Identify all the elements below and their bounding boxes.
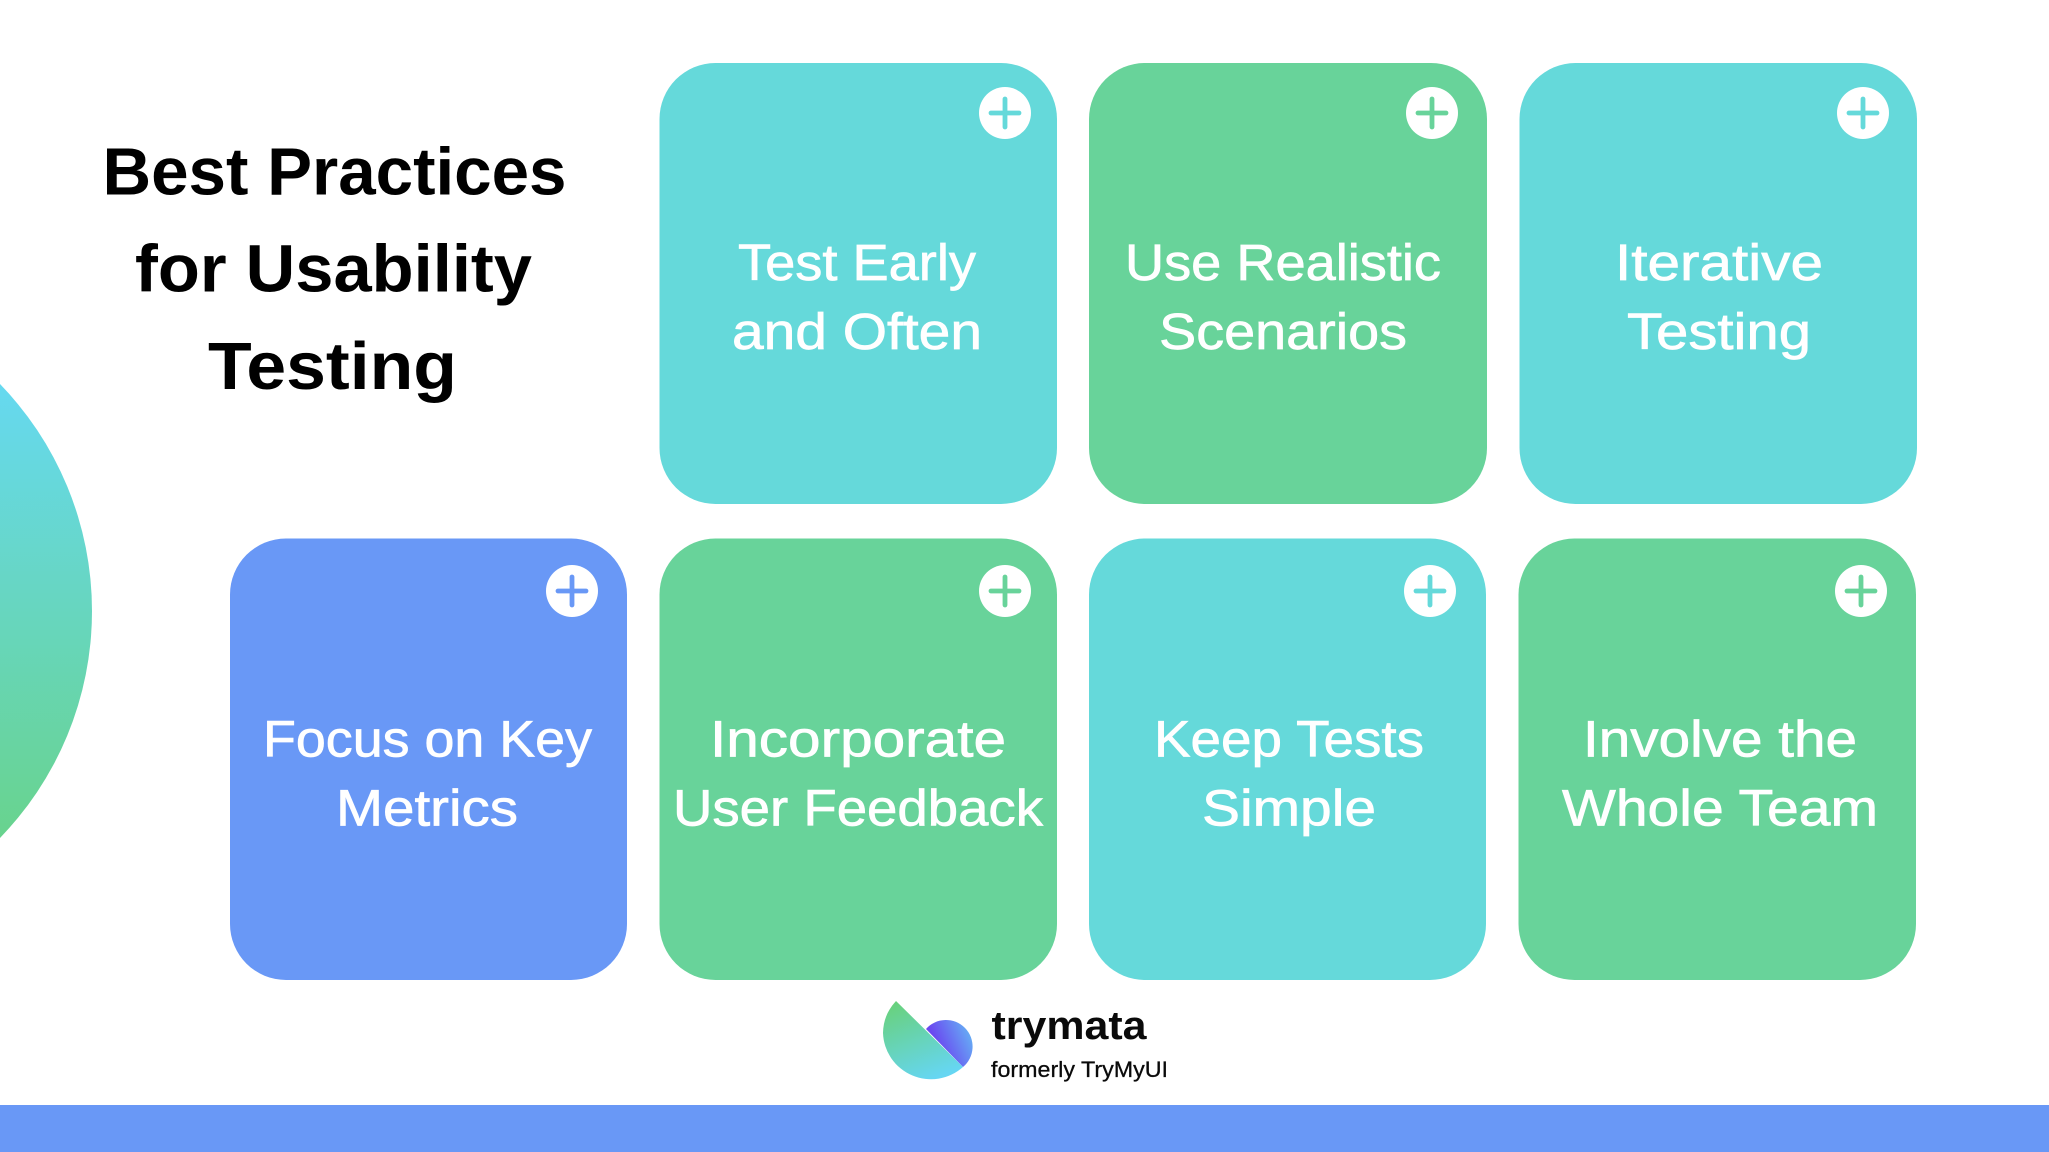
panel: Test Early and Often xyxy=(660,63,1057,504)
logo: trymata xyxy=(883,1001,1168,1082)
panel: Involve the Whole Team xyxy=(1518,538,1916,980)
panel: Use Realistic Scenarios: Use Realistic xyxy=(1125,234,1441,291)
logo: trymata: formerly TryMyUI xyxy=(991,1057,1168,1082)
panel: Incorporate User Feedback: Incorporate xyxy=(710,710,1006,768)
panel: Focus on Key Metrics xyxy=(230,538,627,980)
panel: Iterative Testing: Testing xyxy=(1627,303,1811,360)
panel: Iterative Testing xyxy=(1520,63,1917,504)
title: Testing xyxy=(208,329,457,404)
panel: Iterative Testing: Iterative xyxy=(1615,234,1823,291)
panel: Involve the Whole Team: Whole Team xyxy=(1562,780,1878,836)
panel: Incorporate User Feedback: User Feedback xyxy=(673,780,1044,836)
panel: Test Early and Often: Test Early xyxy=(738,234,977,291)
panel: Focus on Key Metrics: Metrics xyxy=(336,780,518,836)
title xyxy=(102,134,566,404)
title: Best Practices xyxy=(102,134,566,210)
background decorative gradient circle xyxy=(0,285,92,937)
panel: Involve the Whole Team: Involve the xyxy=(1583,710,1857,768)
title: for Usability xyxy=(135,232,532,306)
panel: Use Realistic Scenarios: Scenarios xyxy=(1159,303,1407,360)
panel: Use Realistic Scenarios xyxy=(1089,63,1487,504)
panel: Keep Tests Simple: Simple xyxy=(1202,780,1376,836)
panel: Keep Tests Simple: Keep Tests xyxy=(1154,710,1424,768)
footer bar xyxy=(0,1105,2049,1152)
logo: trymata: trymata xyxy=(992,1004,1147,1048)
panel: Focus on Key Metrics: Focus on Key xyxy=(263,710,593,768)
panel: Incorporate User Feedback xyxy=(660,538,1057,980)
panel: Test Early and Often: and Often xyxy=(732,303,982,360)
panel: Keep Tests Simple xyxy=(1089,538,1486,980)
